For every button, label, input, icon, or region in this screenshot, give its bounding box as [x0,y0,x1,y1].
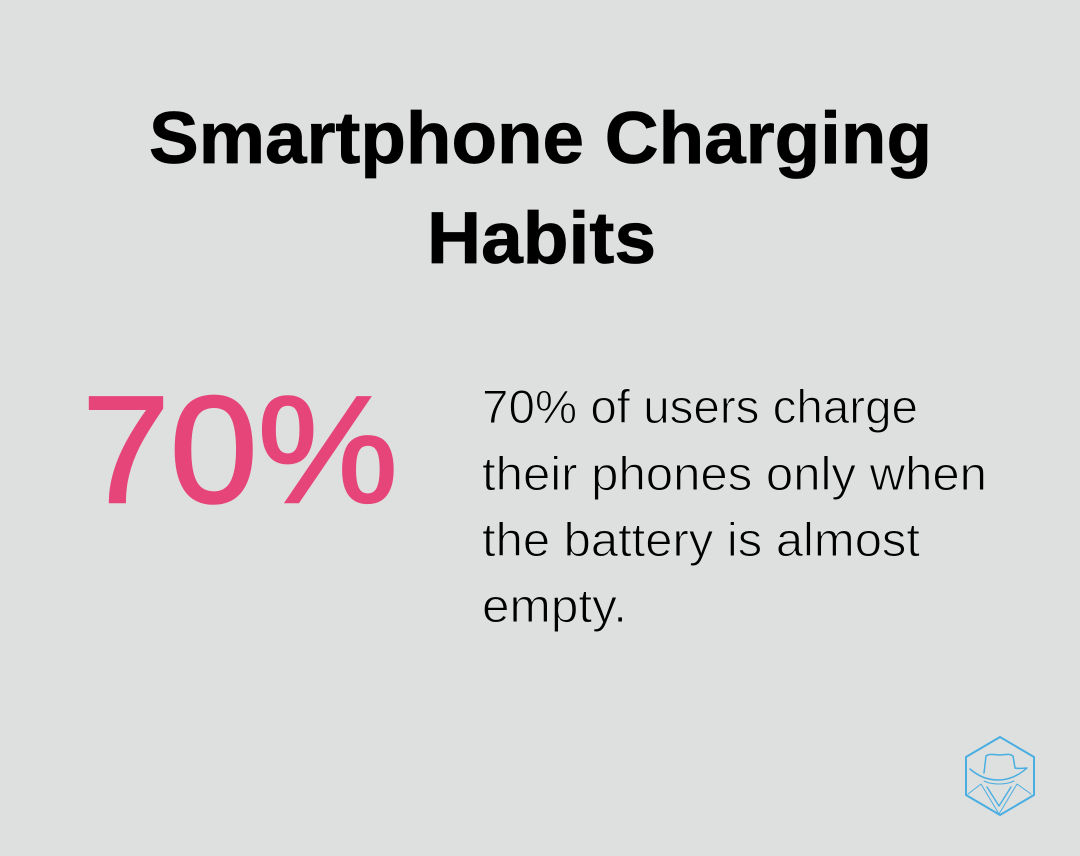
description text: their phones only when [482,447,987,500]
icon: hexagon spy logo [966,737,1034,815]
title: Habits [427,198,656,279]
description text: empty. [482,579,627,632]
title [149,98,932,279]
description text: 70% of users charge [482,380,918,433]
description text [482,380,987,632]
big statistic: 70%: 70% [82,365,398,535]
title: Smartphone Charging [149,98,932,179]
description text: the battery is almost [482,513,920,566]
